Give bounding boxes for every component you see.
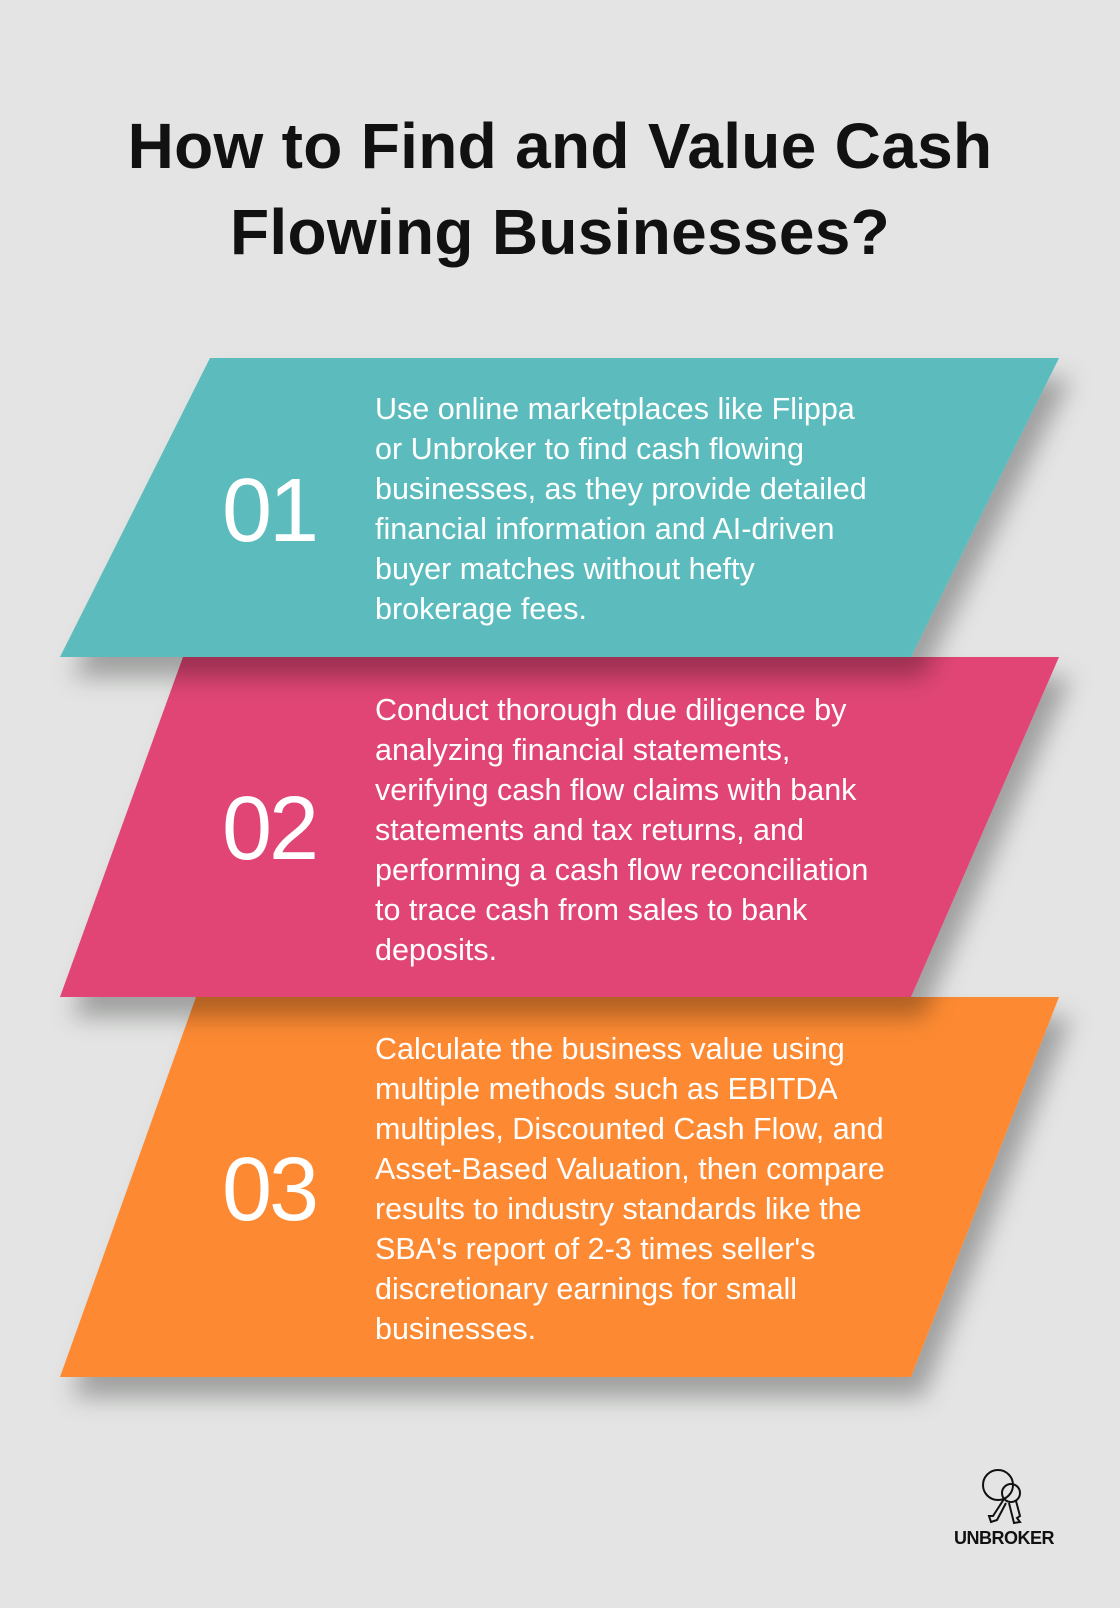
text 02 [375, 693, 868, 967]
number 03: 03 [222, 1140, 316, 1240]
text 03 [375, 1032, 885, 1346]
icon: keys [982, 1469, 1022, 1524]
text 03: discretionary earnings for small [375, 1272, 797, 1306]
text 02: Conduct thorough due diligence by [375, 693, 846, 727]
text 01 [375, 392, 867, 626]
number 01: 01 [222, 461, 316, 561]
text 02: performing a cash flow reconciliation [375, 853, 868, 887]
text 03: SBA's report of 2-3 times seller's [375, 1232, 816, 1266]
panel 3 orange [60, 997, 1059, 1377]
panel 1 teal [60, 358, 1059, 657]
text 03: businesses. [375, 1312, 536, 1346]
logo text: UNBROKER [954, 1528, 1054, 1548]
text 03: multiple methods such as EBITDA [375, 1072, 838, 1106]
text 01: financial information and AI-driven [375, 512, 834, 546]
text 01: or Unbroker to find cash flowing [375, 432, 804, 466]
text 02: to trace cash from sales to bank [375, 893, 807, 927]
text 01: businesses, as they provide detailed [375, 472, 867, 506]
text 02: verifying cash flow claims with bank [375, 773, 856, 807]
text 03: Calculate the business value using [375, 1032, 845, 1066]
text 02: statements and tax returns, and [375, 813, 804, 847]
text 01: Use online marketplaces like Flippa [375, 392, 855, 426]
logo [954, 1469, 1054, 1548]
text 03: multiples, Discounted Cash Flow, and [375, 1112, 884, 1146]
text 02: deposits. [375, 933, 497, 967]
text 03: Asset-Based Valuation, then compare [375, 1152, 885, 1186]
text 02: analyzing financial statements, [375, 733, 790, 767]
title: How to Find and Value Cash [128, 110, 992, 182]
number 02: 02 [222, 779, 316, 879]
title [128, 110, 992, 268]
panel 2 pink [60, 657, 1059, 997]
text 01: buyer matches without hefty [375, 552, 755, 586]
text 03: results to industry standards like the [375, 1192, 862, 1226]
title: Flowing Businesses? [230, 196, 890, 268]
text 01: brokerage fees. [375, 592, 587, 626]
